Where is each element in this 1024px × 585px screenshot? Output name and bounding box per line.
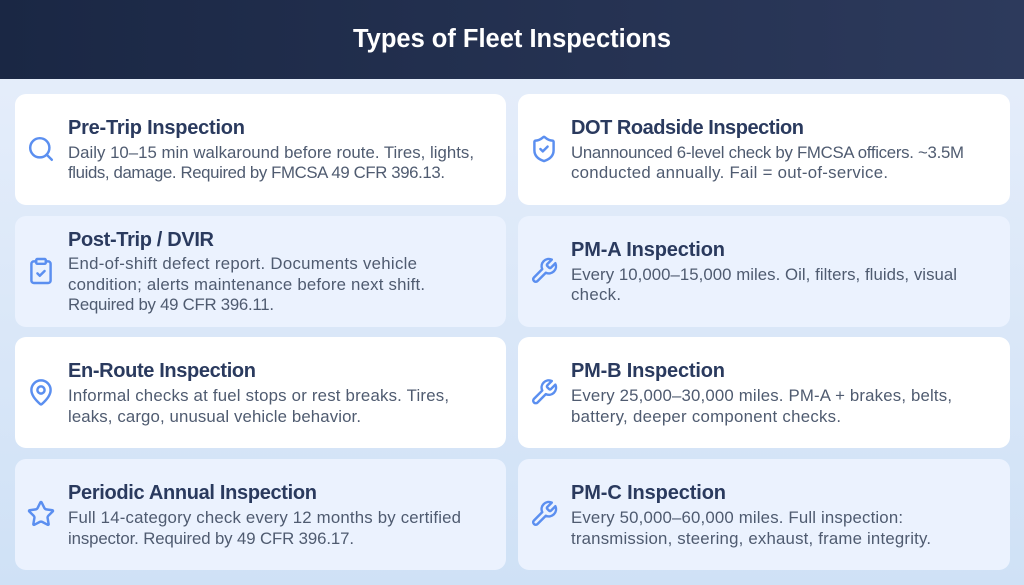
panel: PM-C Inspection bbox=[518, 459, 1010, 570]
description: DOT Roadside: conducted annually. Fail = out-of-service. bbox=[571, 163, 888, 182]
icon: shield check bbox=[534, 137, 554, 161]
title: Types of Fleet Inspections bbox=[353, 25, 671, 53]
description: Post-Trip bbox=[68, 254, 425, 314]
description: En-Route bbox=[68, 386, 449, 426]
header banner bbox=[0, 0, 1024, 79]
icon: star bbox=[29, 502, 53, 525]
description: PM-B bbox=[571, 386, 952, 426]
panel: PM-B Inspection bbox=[518, 337, 1010, 448]
heading: Post-Trip / DVIR: Post-Trip / DVIR bbox=[68, 229, 215, 251]
icon: wrench bbox=[533, 380, 556, 403]
panel: Pre-Trip Inspection bbox=[15, 94, 506, 205]
icon: map pin bbox=[31, 380, 51, 404]
icon: magnifier bbox=[30, 138, 52, 160]
description: DOT Roadside: Unannounced 6-level check by FMCSA officers. ~3.5M bbox=[571, 143, 964, 162]
panel: PM-A Inspection bbox=[518, 216, 1010, 327]
description: En-Route: Informal checks at fuel stops or rest breaks. Tires, bbox=[68, 386, 449, 405]
description: Post-Trip: Required by 49 CFR 396.11. bbox=[68, 295, 274, 314]
description: Pre-Trip: Daily 10–15 min walkaround before route. Tires, lights, bbox=[68, 143, 474, 162]
heading: PM-A Inspection: PM-A Inspection bbox=[571, 239, 725, 261]
description: Post-Trip: condition; alerts maintenance before next shift. bbox=[68, 275, 425, 294]
panel: En-Route Inspection bbox=[15, 337, 506, 448]
description: Pre-Trip bbox=[68, 143, 474, 182]
description: Post-Trip: End-of-shift defect report. Documents vehicle bbox=[68, 254, 417, 273]
description: PM-A: Every 10,000–15,000 miles. Oil, filters, fluids, visual bbox=[571, 265, 957, 284]
icon: wrench bbox=[533, 502, 556, 525]
heading: Periodic Annual Inspection: Periodic Annual Inspection bbox=[68, 482, 317, 504]
panel: DOT Roadside Inspection bbox=[518, 94, 1010, 205]
description: Periodic Annual: inspector. Required by 49 CFR 396.17. bbox=[68, 529, 354, 548]
panel: Periodic Annual Inspection bbox=[15, 459, 506, 570]
description: PM-C: transmission, steering, exhaust, frame integrity. bbox=[571, 529, 931, 548]
panel: Post-Trip / DVIR bbox=[15, 216, 506, 327]
description: DOT Roadside bbox=[571, 143, 964, 182]
description: PM-A: check. bbox=[571, 285, 621, 304]
heading: En-Route Inspection: En-Route Inspection bbox=[68, 360, 256, 382]
description: PM-A bbox=[571, 265, 957, 304]
description: PM-B: battery, deeper component checks. bbox=[571, 407, 841, 426]
heading: PM-B Inspection: PM-B Inspection bbox=[571, 360, 725, 382]
icon: clipboard check bbox=[31, 259, 51, 283]
description: PM-C bbox=[571, 508, 931, 548]
description: En-Route: leaks, cargo, unusual vehicle behavior. bbox=[68, 407, 361, 426]
description: Periodic Annual: Full 14-category check every 12 months by certified bbox=[68, 508, 461, 527]
description: PM-C: Every 50,000–60,000 miles. Full inspection: bbox=[571, 508, 903, 527]
description: PM-B: Every 25,000–30,000 miles. PM-A + brakes, belts, bbox=[571, 386, 952, 405]
heading: PM-C Inspection: PM-C Inspection bbox=[571, 482, 726, 504]
description: Pre-Trip: fluids, damage. Required by FMCSA 49 CFR 396.13. bbox=[68, 163, 445, 182]
heading: DOT Roadside Inspection: DOT Roadside Inspection bbox=[571, 117, 804, 139]
heading: Pre-Trip Inspection: Pre-Trip Inspection bbox=[68, 117, 245, 139]
description: Periodic Annual bbox=[68, 508, 461, 548]
icon: wrench bbox=[533, 259, 556, 282]
